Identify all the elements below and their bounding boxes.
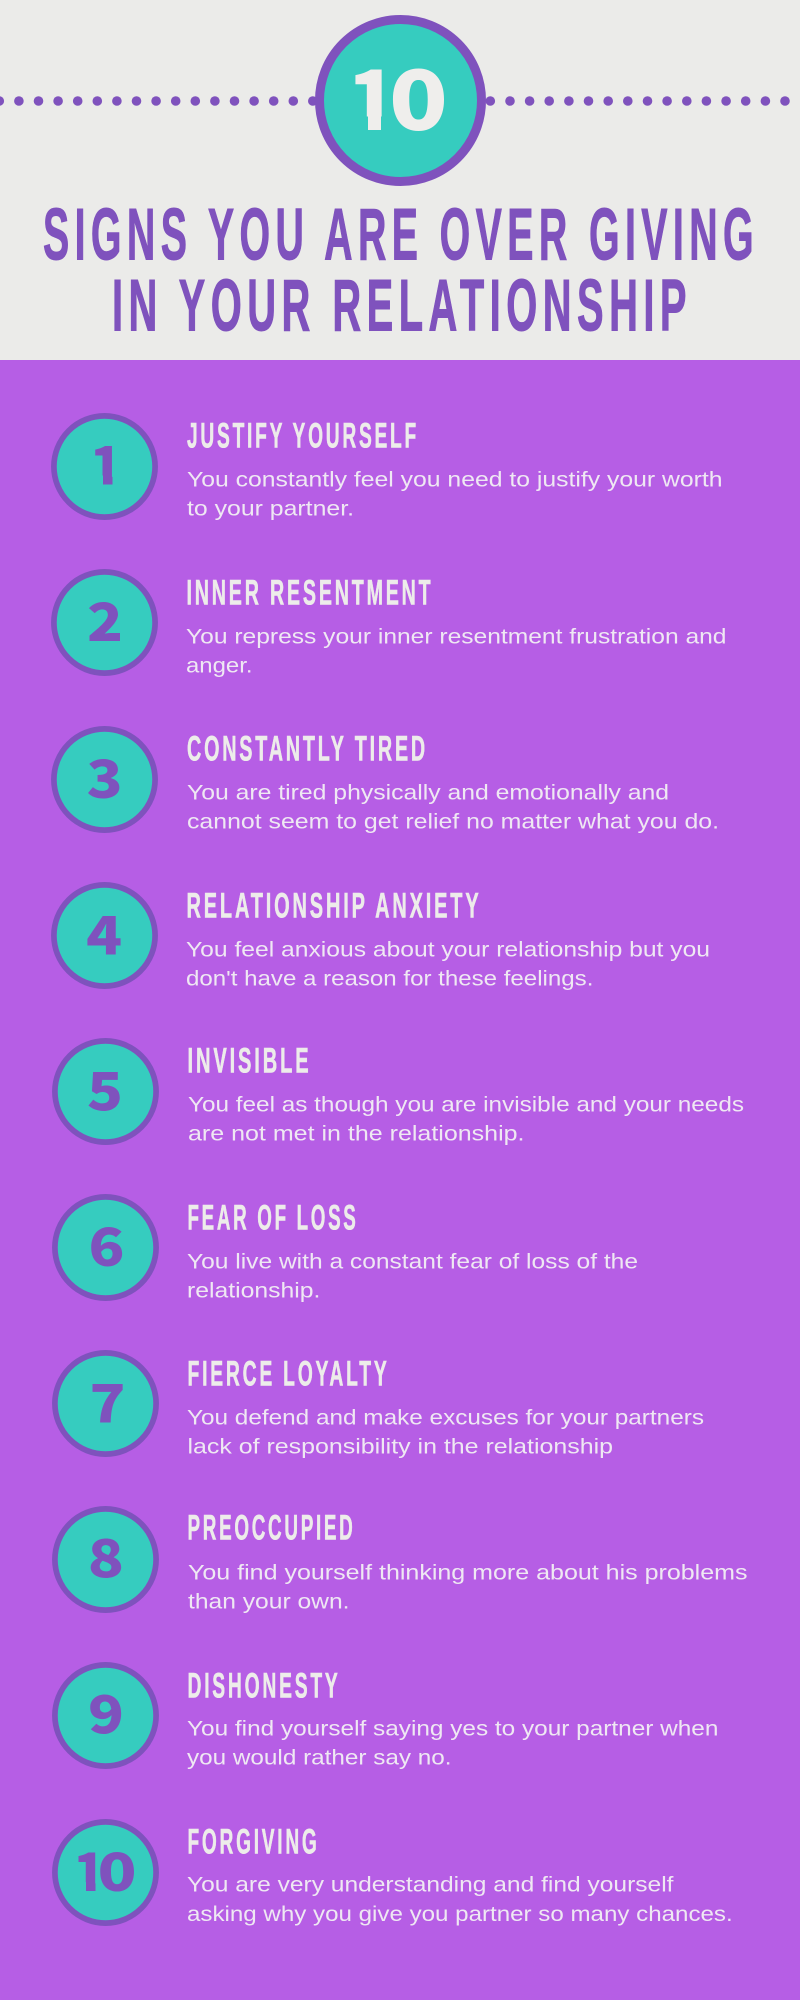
item 10: forgiving — [55, 1822, 733, 1926]
dotted line: left — [0, 96, 318, 106]
badge: big number 10 — [320, 20, 482, 182]
item 5: invisible: are not met in the relationship. — [188, 1122, 524, 1145]
item 7: fierce loyalty: 7 — [90, 1362, 126, 1438]
item 1: justify yourself: JUSTIFY YOURSELF — [187, 416, 419, 456]
item 1: justify yourself — [54, 416, 722, 520]
item 6: fear of loss: FEAR OF LOSS — [188, 1198, 358, 1238]
item 6: fear of loss: 6 — [88, 1206, 124, 1282]
item 2: inner resentment: anger. — [186, 655, 252, 678]
item 10: forgiving: You are very understanding and find yourself — [187, 1874, 674, 1897]
item 9: dishonesty: 9 — [88, 1674, 124, 1750]
item 6: fear of loss: You live with a constant fear of loss of the — [187, 1250, 638, 1273]
item 8: preoccupied — [55, 1508, 747, 1613]
item 3: constantly tired — [54, 729, 719, 834]
dotted line: right — [486, 96, 790, 106]
item 6: fear of loss — [55, 1197, 638, 1302]
item 8: preoccupied: You find yourself thinking more about his problems — [188, 1561, 748, 1584]
item 9: dishonesty: you would rather say no. — [187, 1747, 452, 1770]
item 1: justify yourself: You constantly feel you need to justify your worth — [187, 469, 722, 492]
item 7: fierce loyalty — [55, 1353, 704, 1459]
item 10: forgiving: asking why you give you partner so many chances. — [187, 1903, 733, 1926]
item 2: inner resentment: INNER RESENTMENT — [186, 574, 434, 612]
panel: header background — [0, 0, 800, 360]
item 8: preoccupied: than your own. — [188, 1590, 350, 1613]
item 6: fear of loss: relationship. — [187, 1279, 320, 1302]
item 4: relationship anxiety: You feel anxious about your relationship but you — [186, 938, 710, 961]
item 3: constantly tired: cannot seem to get relief no matter what you do. — [187, 811, 719, 834]
item 4: relationship anxiety — [54, 885, 710, 990]
item 9: dishonesty: You find yourself saying yes to your partner when — [187, 1718, 718, 1741]
item 3: constantly tired: 3 — [87, 738, 123, 814]
item 7: fierce loyalty: You defend and make excuses for your partners — [187, 1406, 704, 1429]
item 5: invisible: You feel as though you are invisible and your needs — [188, 1093, 744, 1116]
title — [43, 194, 759, 346]
item 7: fierce loyalty: lack of responsibility in the relationship — [188, 1436, 613, 1459]
item 5: invisible: 5 — [87, 1051, 123, 1127]
item 2: inner resentment — [54, 572, 726, 678]
item 4: relationship anxiety: don't have a reason for these feelings. — [186, 967, 593, 990]
item 8: preoccupied: 8 — [88, 1518, 124, 1594]
item 10: forgiving: 1 — [73, 1831, 106, 1907]
item 8: preoccupied: PREOCCUPIED — [188, 1508, 356, 1548]
item 4: relationship anxiety: RELATIONSHIP ANXIETY — [186, 886, 482, 926]
item 5: invisible: INVISIBLE — [188, 1042, 312, 1080]
item 3: constantly tired: You are tired physically and emotionally and — [187, 781, 669, 804]
item 2: inner resentment: 2 — [87, 581, 123, 657]
item 5: invisible — [55, 1041, 744, 1145]
item 10: forgiving: FORGIVING — [188, 1822, 320, 1862]
item 1: justify yourself: 1 — [90, 424, 122, 500]
item 9: dishonesty — [55, 1665, 718, 1770]
item 3: constantly tired: CONSTANTLY TIRED — [187, 730, 428, 768]
item 1: justify yourself: to your partner. — [187, 497, 354, 520]
item 2: inner resentment: You repress your inner resentment frustration and — [186, 626, 726, 649]
item 4: relationship anxiety: 4 — [86, 894, 122, 970]
badge: big number 10: 1 — [347, 34, 398, 154]
item 7: fierce loyalty: FIERCE LOYALTY — [188, 1354, 390, 1394]
item 9: dishonesty: DISHONESTY — [188, 1666, 340, 1706]
badge: big number 10: 0 — [389, 34, 448, 154]
item 10: forgiving: 0 — [98, 1831, 137, 1907]
